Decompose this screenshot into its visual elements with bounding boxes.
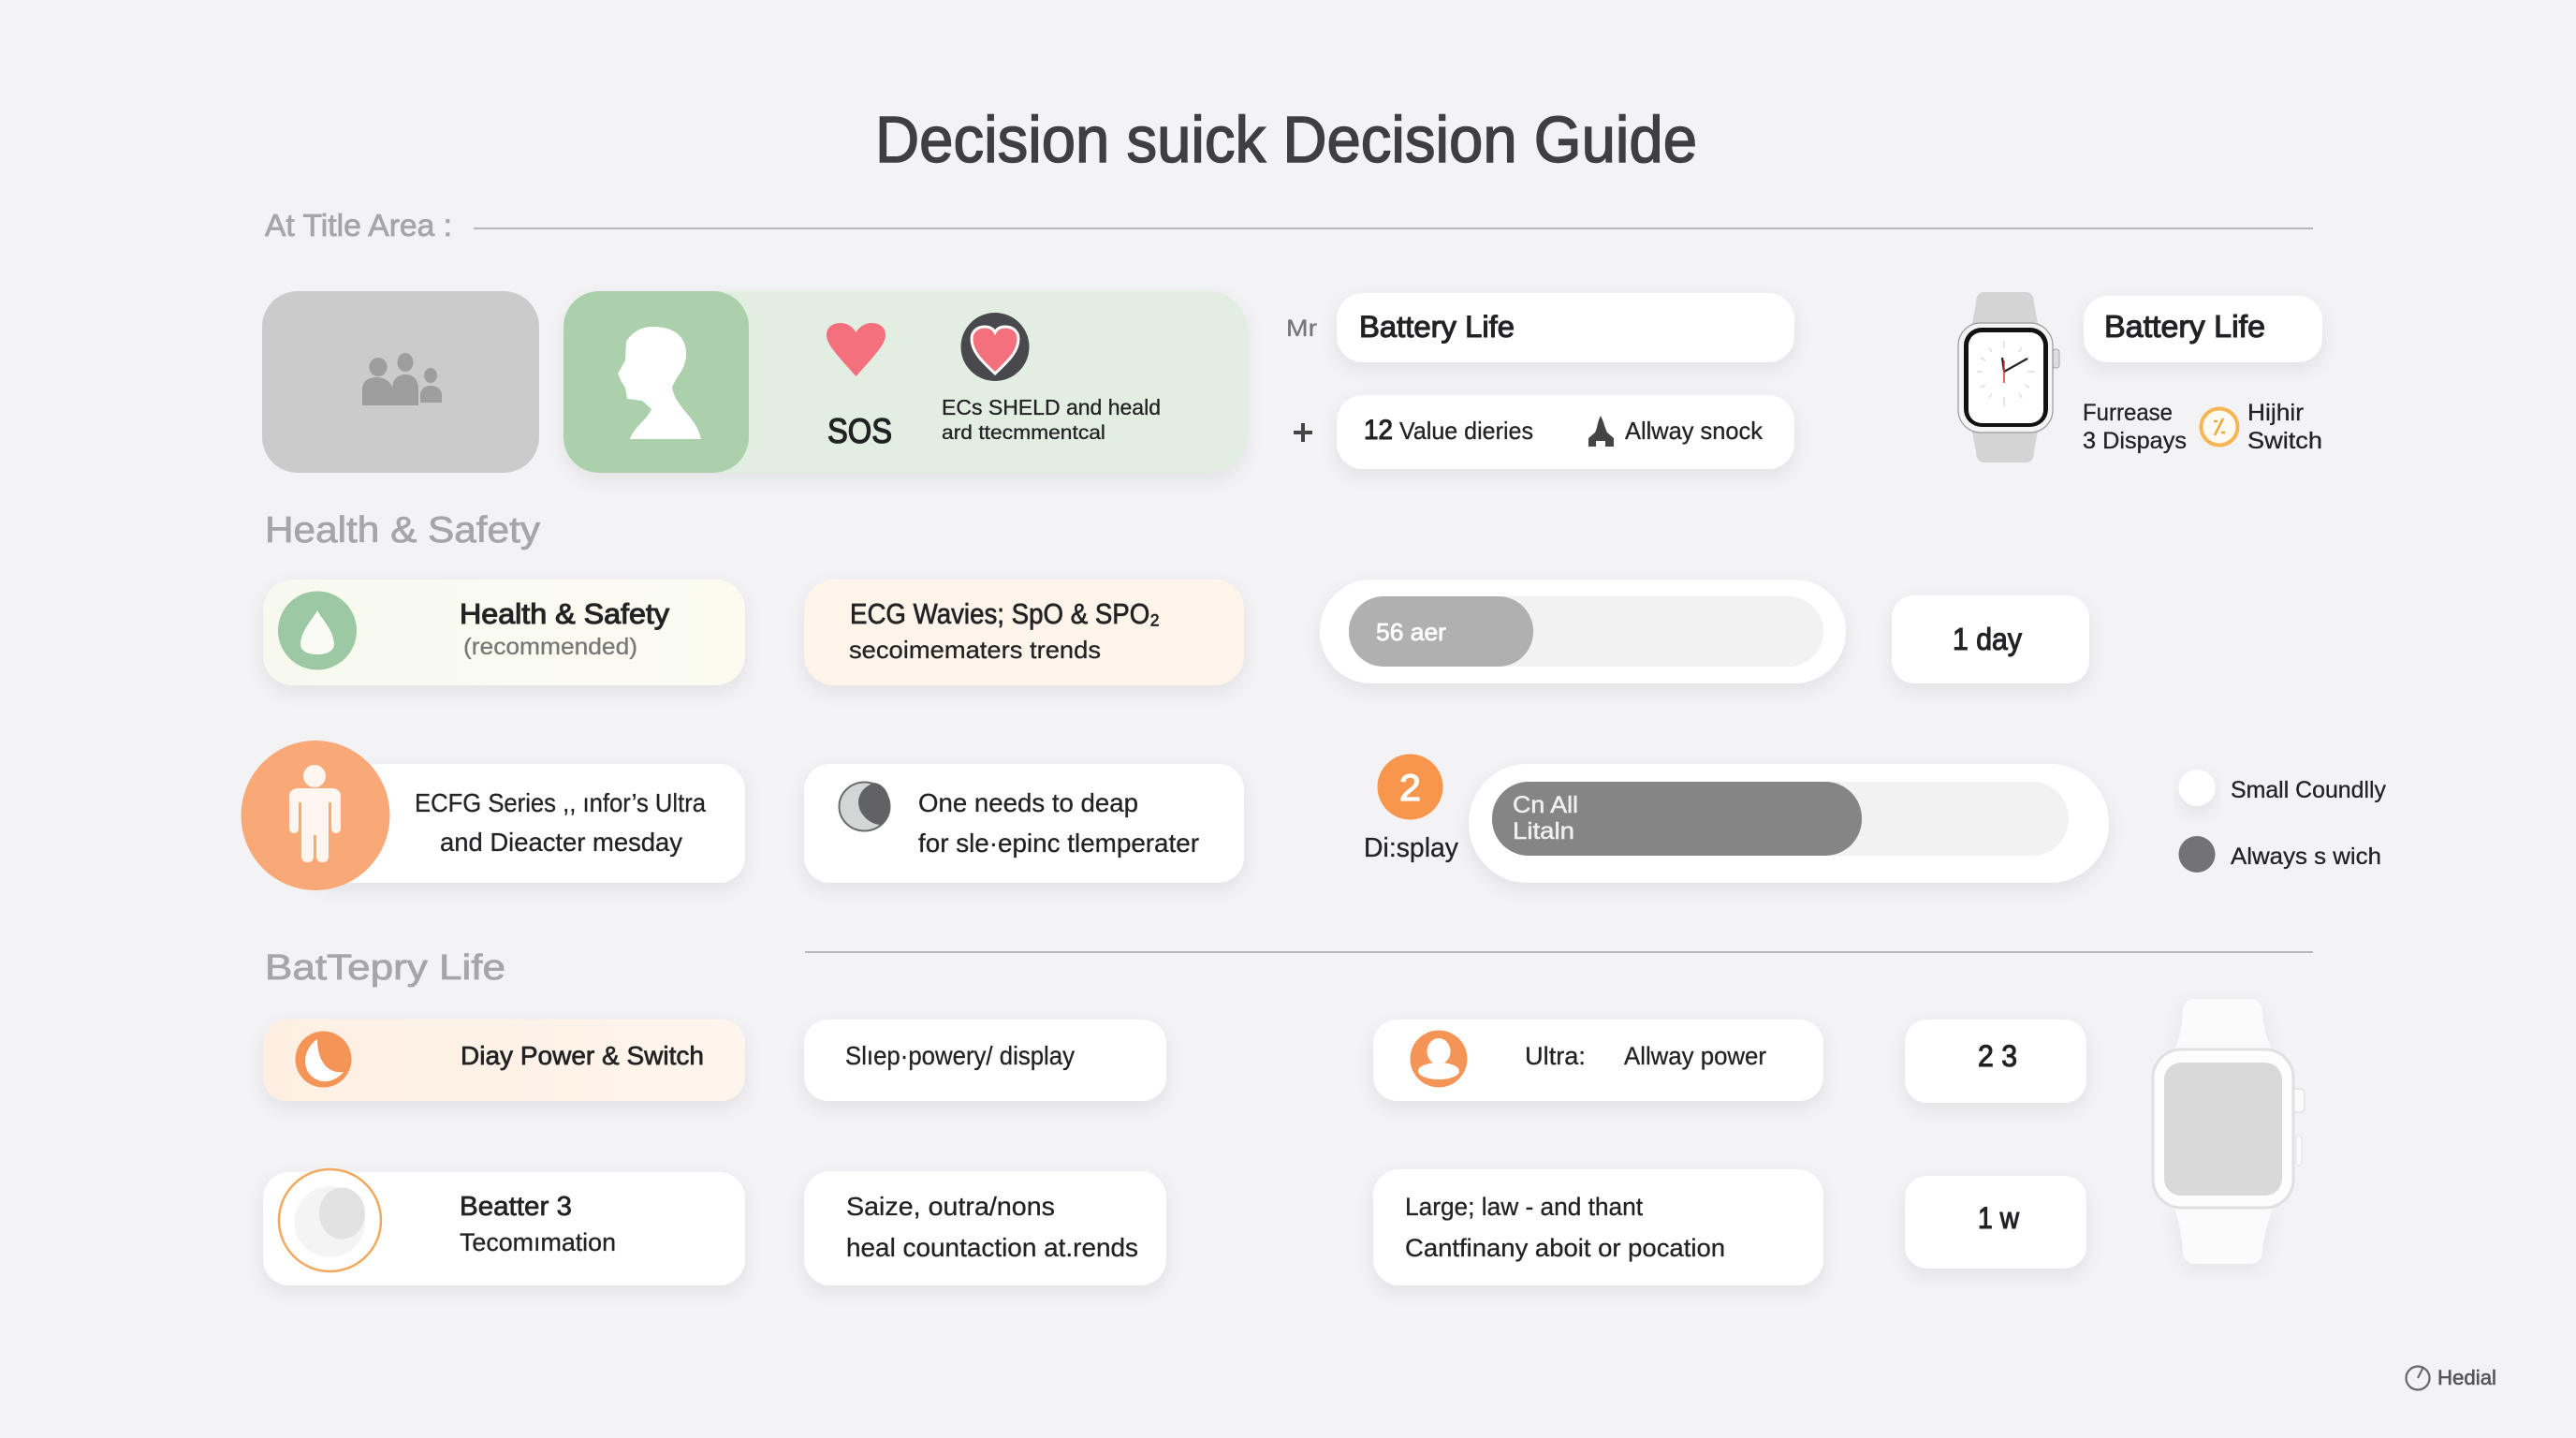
progress bar: Cn All: Litaln (1513, 818, 1574, 844)
card: health and safety recommended (263, 580, 745, 685)
card: ultra: Ultra: (1525, 1042, 1586, 1070)
card: sleep: One needs to deap (918, 788, 1138, 817)
text: ECG description: ECs SHELD and heald (942, 395, 1161, 419)
icon: orange user (1410, 1030, 1468, 1088)
heading: battery life: BatTepry Life (265, 948, 505, 988)
card: 1 w: 1 w (1978, 1201, 2020, 1235)
icon: plus (1294, 423, 1312, 442)
card: ultra: Allway power (1624, 1042, 1766, 1070)
card: saize (804, 1171, 1166, 1285)
icon: head silhouette (618, 327, 701, 439)
badge: 2 display: 2 (1399, 768, 1421, 809)
text: hijhir switch (2247, 400, 2322, 454)
card: ECFG series: ECFG Series ,, ınfor’s Ultra (415, 788, 706, 817)
card: value and always: Allway snock (1625, 417, 1764, 445)
text: furrease displays: 3 Dispays (2083, 428, 2187, 454)
text: furrease displays (2083, 400, 2187, 454)
progress bar: Cn All: Cn All (1513, 792, 1578, 818)
card: battery life 2: Battery Life (2104, 309, 2265, 344)
card: large: Large; law - and thant (1405, 1193, 1643, 1221)
text: furrease displays: Furrease (2083, 400, 2173, 426)
card: sleep power: Slıep·powery/ display (845, 1041, 1075, 1070)
title: Decision suick Decision Guide (875, 103, 1697, 176)
legend: Always s wich (2231, 844, 2381, 870)
card: saize: heal countaction at.rends (846, 1233, 1138, 1262)
icon: heart (827, 323, 886, 376)
card: battery life 2 (2084, 296, 2322, 362)
card: 1 w (1905, 1176, 2086, 1269)
card: ECG waves: secoimematers trends (849, 636, 1101, 664)
card: battery life: Battery Life (1359, 310, 1515, 344)
card: ECFG series (242, 741, 745, 890)
card: ultra (1373, 1020, 1823, 1101)
card: 1 day: 1 day (1953, 622, 2022, 656)
label: SOS: SOS (827, 412, 892, 450)
card: ECG waves: ECG Wavies; SpO & SPO₂ (850, 597, 1160, 630)
legend: Small Coundlly (2231, 777, 2386, 803)
icon: orange moon (296, 1032, 352, 1088)
text: ECG description: ard ttecmmentcal (942, 422, 1105, 444)
icon: group of people (362, 353, 442, 405)
icon: smartwatch with clock (1958, 292, 2059, 462)
card: day power and switch (263, 1020, 745, 1101)
card: 2 3 (1905, 1020, 2086, 1103)
panel: people placeholder (262, 291, 539, 473)
badge: 2 display (1364, 755, 1458, 863)
progress bar: Cn All (1469, 764, 2109, 883)
card: sleep: for sle·epinc tlemperater (918, 829, 1199, 858)
card: health and safety recommended: Health & Safety (460, 597, 670, 630)
card: large (1373, 1169, 1823, 1285)
card: ECFG series: and Dieacter mesday (440, 828, 682, 857)
heading: at title area: At Title Area : (265, 208, 452, 242)
card: value and always: Value dieries (1399, 417, 1533, 445)
icon: orange person (242, 741, 389, 890)
card: beatter 3: Beatter 3 (460, 1192, 572, 1222)
logo: hedial: Hedial (2437, 1366, 2496, 1389)
card: sleep (804, 764, 1244, 883)
logo: hedial (2406, 1366, 2496, 1389)
card: battery life (1337, 293, 1794, 362)
legend (2179, 770, 2386, 873)
card: saize: Saize, outra/nons (846, 1192, 1055, 1221)
card: health and safety recommended: (recommended) (463, 634, 637, 660)
icon: heart in dark circle (960, 313, 1030, 381)
panel: health and SOS (564, 291, 1247, 473)
card: sleep power (804, 1020, 1166, 1101)
text: hijhir switch: Hijhir (2247, 400, 2304, 426)
icon: ring with circle (279, 1169, 381, 1271)
card: value and always: 12 (1364, 415, 1393, 446)
card: beatter 3 (263, 1169, 745, 1285)
badge: 2 display: Di:splay (1364, 833, 1458, 863)
card: ECG waves (804, 580, 1244, 685)
icon: moon (839, 783, 889, 831)
icon: blank smartwatch (2153, 999, 2305, 1264)
card: large: Cantfinany aboit or pocation (1405, 1234, 1725, 1262)
icon: figure (1588, 416, 1614, 447)
text: ECG description (942, 395, 1161, 444)
card: day power and switch: Diay Power & Switch (461, 1041, 704, 1070)
icon: orange ring (2202, 408, 2237, 446)
card: beatter 3: Tecomımation (460, 1228, 616, 1256)
icon: green drop (278, 592, 357, 670)
card: 2 3: 2 3 (1978, 1039, 2017, 1073)
text: hijhir switch: Switch (2247, 428, 2322, 454)
card: value and always (1337, 395, 1794, 469)
progress bar: 56 aer (1320, 580, 1846, 683)
progress bar: 56 aer: 56 aer (1376, 618, 1446, 646)
label: Mr: Mr (1286, 315, 1317, 342)
card: 1 day (1892, 595, 2089, 683)
heading: health and safety: Health & Safety (265, 510, 541, 550)
